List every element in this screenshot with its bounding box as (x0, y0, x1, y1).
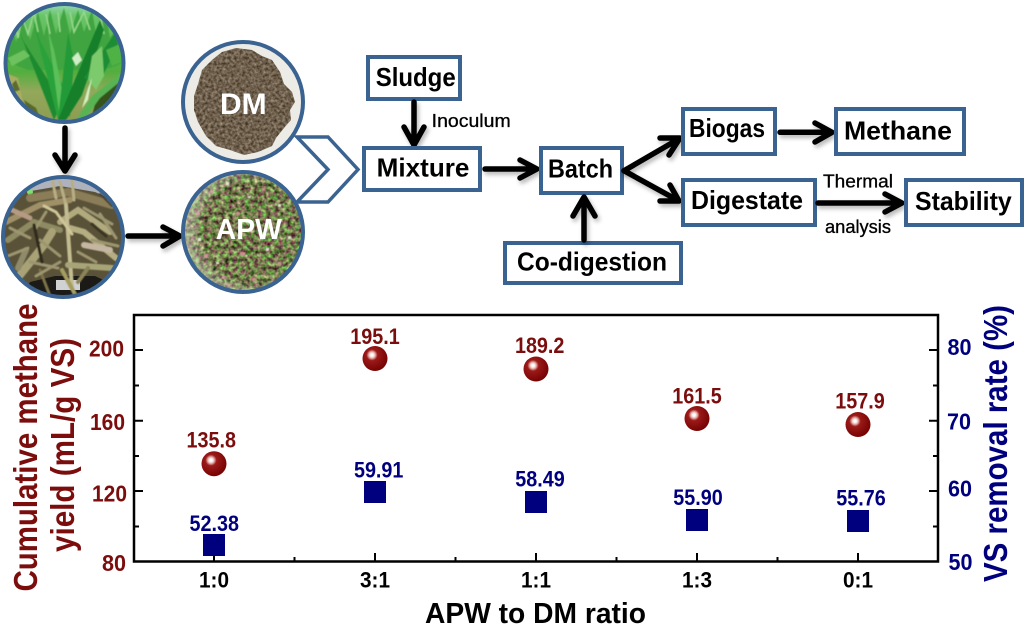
box: Biogas (683, 109, 775, 154)
x axis labels: 0:1 (843, 568, 873, 592)
right axis labels: 70 (947, 408, 971, 434)
x axis labels: 3:1 (360, 568, 390, 592)
right axis labels: 80 (948, 334, 972, 360)
box: Batch: Batch (548, 154, 613, 184)
left axis title: yield (mL/g VS) (44, 338, 81, 552)
arrow: Batch to Biogas (624, 138, 680, 171)
label: analysis: analysis (825, 217, 891, 237)
methane yield series: 189.2 (515, 333, 564, 358)
box: Digestate (683, 180, 815, 225)
label: DM: DM (220, 88, 267, 121)
photo: APW (183, 172, 303, 292)
box: Methane (836, 109, 964, 154)
VS removal series: 58.49 (515, 467, 565, 492)
arrow: Biogas to Methane (780, 123, 832, 142)
right axis labels (947, 334, 972, 575)
left axis labels: 200 (89, 336, 124, 362)
arrow: Digestate to Stability (818, 194, 902, 212)
box: Batch (541, 148, 622, 193)
VS removal series (190, 458, 886, 556)
box: Biogas: Biogas (689, 113, 765, 143)
label: APW: APW (216, 214, 282, 246)
left axis title: Cumulative methane (7, 304, 44, 592)
arrow: Batch to Digestate (624, 171, 679, 201)
arrow: dried leaves to APW (128, 227, 180, 246)
left axis labels (89, 336, 127, 576)
x axis labels: 1:3 (682, 568, 712, 592)
right axis labels: 50 (948, 549, 972, 575)
x axis labels (199, 568, 873, 592)
methane yield series: 157.9 (835, 388, 885, 413)
box: Digestate: Digestate (691, 185, 803, 215)
box: Methane: Methane (844, 115, 952, 145)
x axis labels: 1:0 (199, 568, 229, 592)
methane yield series: 135.8 (187, 428, 236, 453)
methane yield series (187, 324, 885, 476)
box: Sludge: Sludge (376, 62, 456, 92)
label: Thermal: Thermal (823, 172, 893, 192)
right axis title: VS removal rate (%) (977, 305, 1014, 582)
left axis labels: 120 (92, 481, 127, 507)
box: Stability: Stability (915, 186, 1012, 216)
left axis labels: 80 (102, 550, 126, 576)
left axis title (7, 304, 81, 592)
box: Co-digestion (505, 243, 681, 283)
arrow: Mixture to Batch (485, 160, 537, 178)
scatter chart (7, 304, 1014, 630)
x axis labels: 1:1 (521, 568, 551, 592)
box: Mixture: Mixture (377, 153, 469, 183)
VS removal series: 55.90 (673, 485, 723, 510)
box: Mixture (364, 148, 480, 190)
label: Inoculum: Inoculum (432, 111, 511, 131)
photo: aloe plant (4, 2, 126, 124)
left axis labels: 160 (90, 409, 125, 435)
arrow: plant to dried leaves (55, 128, 75, 171)
plot frame and ticks (134, 315, 938, 562)
VS removal series: 52.38 (190, 511, 239, 536)
methane yield series: 161.5 (672, 383, 722, 408)
box: Co-digestion: Co-digestion (517, 247, 667, 277)
VS removal series: 59.91 (354, 458, 403, 483)
arrow: Sludge to Mixture (404, 102, 424, 145)
x axis title: APW to DM ratio (425, 598, 646, 630)
arrow: Co-digestion to Batch (573, 197, 595, 240)
flow diagram (364, 57, 1022, 283)
chevron connector (297, 137, 358, 202)
photo: dried leaves (0, 175, 125, 300)
photo: DM (183, 42, 303, 162)
box: Sludge (368, 57, 460, 99)
box: Stability (906, 180, 1022, 225)
VS removal series: 55.76 (836, 486, 886, 511)
methane yield series: 195.1 (350, 324, 400, 349)
right axis labels: 60 (948, 476, 972, 502)
